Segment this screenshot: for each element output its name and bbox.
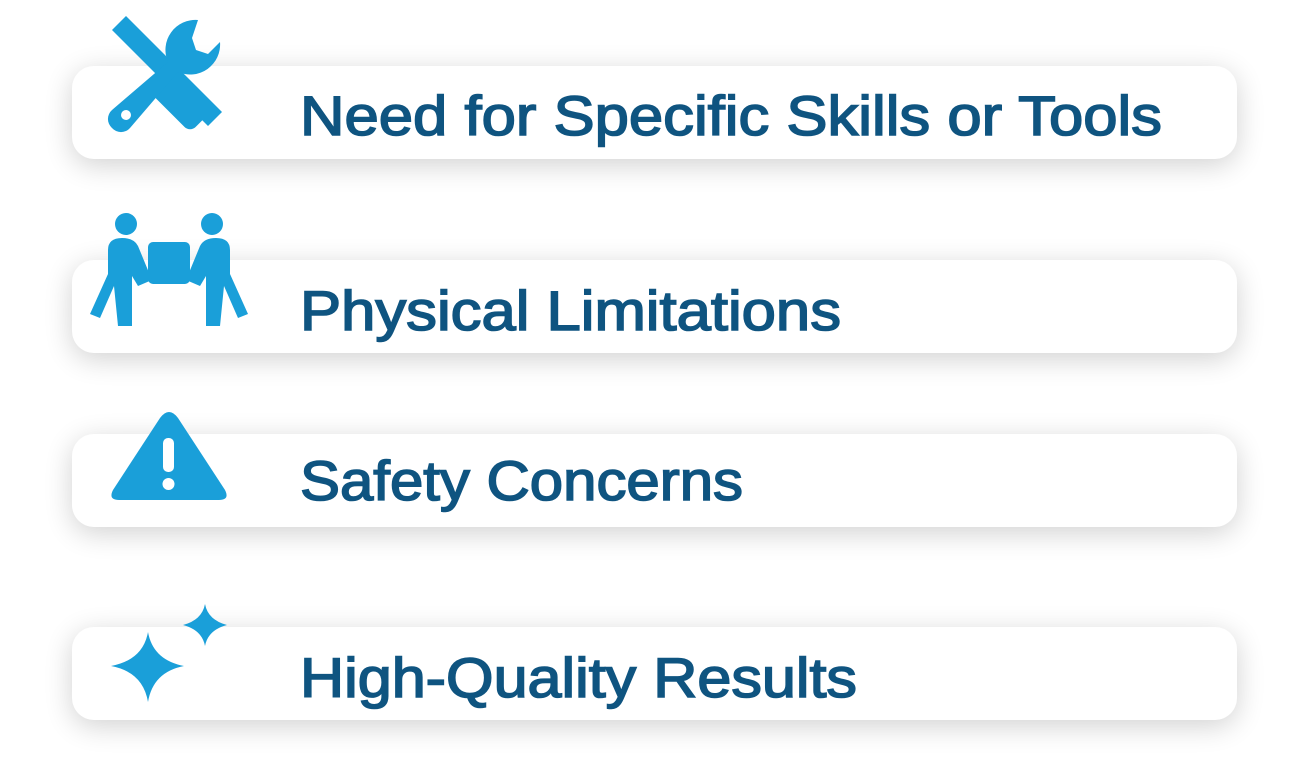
label: physical limitations: Physical Limitations: [300, 279, 841, 342]
panel: safety concerns: [72, 412, 1237, 533]
panel: specific skills: [72, 16, 1237, 165]
label: need for specific skills: Need for Specific Skills or Tools: [300, 84, 1162, 147]
panel: physical limitations: [72, 213, 1237, 359]
icon: sparkles: [111, 604, 227, 702]
icon: two people carrying box: [90, 213, 248, 326]
icon: wrench and screwdriver: [108, 16, 222, 133]
label: high-quality results: High-Quality Results: [300, 646, 857, 709]
label: safety concerns: Safety Concerns: [300, 449, 743, 512]
panel: high-quality results: [72, 604, 1237, 726]
icon: warning triangle: [111, 412, 227, 500]
